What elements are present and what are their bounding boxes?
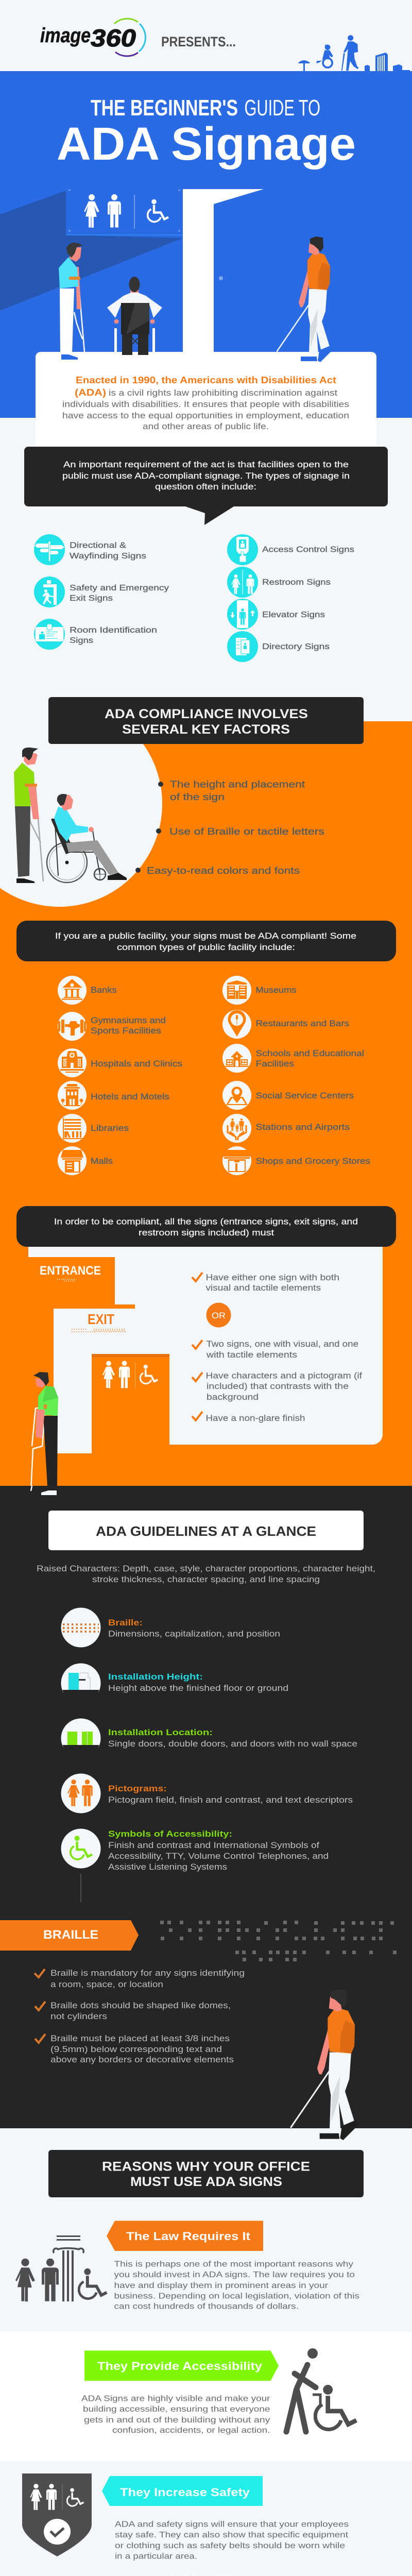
title [57, 95, 356, 170]
text: signage labels left: Signs [70, 636, 93, 645]
text: braille rule items: not cylinders [50, 2012, 107, 2021]
text: braille rule items: Braille dots should be shaped like domes, [50, 2001, 231, 2010]
text: safety paragraph: ADA and safety signs will ensure that your employees [115, 2520, 349, 2529]
item: symbols of accessibility [61, 1829, 329, 1872]
text: requirement items [206, 1273, 362, 1423]
white intro card [36, 352, 376, 455]
heading: reasons: REASONS WHY YOUR OFFICE [102, 2160, 310, 2174]
callout: signage requirement: question often include: [155, 482, 256, 492]
sign: exit [72, 1311, 126, 1332]
text: ADA definition: (ADA) [75, 387, 106, 398]
text: accessibility paragraph: ADA Signs are highly visible and make your [81, 2395, 270, 2403]
reason: the law requires it [15, 2221, 359, 2311]
heading: key factors [48, 697, 364, 744]
text: facility labels: Shops and Grocery Stores [255, 1157, 370, 1166]
list: key factors: The height and placement [170, 779, 305, 789]
item: installation height [61, 1663, 288, 1704]
list: signage types right [227, 534, 354, 662]
illustration: standing man on crutches [14, 748, 43, 883]
item: installation height: Height above the finished floor or ground [108, 1684, 288, 1693]
text: law paragraph: This is perhaps one of the most important reasons why [114, 2260, 353, 2269]
text: facility labels: Schools and Educational [255, 1049, 364, 1058]
callout: signage requirement [24, 447, 388, 525]
item: symbols of accessibility: Assistive Listening Systems [108, 1862, 227, 1872]
illustration: person walking with cane [277, 236, 334, 362]
item: symbols of accessibility: Symbols of Accessibility: [108, 1829, 232, 1839]
text: safety paragraph: or clothing such as safety belts should be worn while [115, 2541, 345, 2550]
icon: library [58, 1114, 87, 1143]
text: requirement items: included) that contrasts with the [207, 1382, 349, 1391]
item: installation location: Installation Location: [108, 1727, 213, 1737]
item: installation location: Single doors, double doors, and doors with no wall space [108, 1739, 357, 1749]
heading: key factors: SEVERAL KEY FACTORS [122, 722, 290, 737]
text: braille rule items [50, 1969, 245, 2064]
text: facility labels: Banks [91, 986, 116, 995]
text: raised characters: stroke thickness, character spacing, and line spacing [92, 1575, 320, 1584]
text: facility labels: Hospitals and Clinics [91, 1059, 182, 1069]
panel: accessibility white band [0, 2331, 412, 2461]
icon: law pictograms [15, 2235, 107, 2301]
logo: image360: image [40, 24, 91, 47]
item: symbols of accessibility: Accessibility, TTY, Volume Control Telephones, and [108, 1852, 329, 1861]
illustration: person in wheelchair [107, 277, 162, 355]
callout: signage requirement: An important requirement of the act is that facilities open to the [63, 460, 349, 469]
callout: public facility: If you are a public facility, your signs must be ADA compliant! Some [55, 931, 356, 941]
callout: signage requirement: public must use ADA-compliant signage. The types of signage in [62, 471, 350, 481]
text: facility labels: Hotels and Motels [91, 1092, 169, 1101]
text: facility labels: Stations and Airports [255, 1123, 350, 1132]
text: signage labels right: Access Control Signs [262, 545, 354, 554]
illustration: seated man in wheelchair [47, 794, 127, 883]
icon: directory [227, 631, 258, 662]
panel: sign requirements background [0, 1247, 383, 1486]
text: facility labels: Museums [255, 986, 297, 995]
text: raised characters: Raised Characters: Depth, case, style, character proportions, character height, [37, 1564, 375, 1573]
item: braille [61, 1607, 280, 1648]
text: accessibility paragraph [81, 2395, 270, 2435]
text: accessibility paragraph: gets in and out of the building without any [84, 2416, 270, 2425]
item: braille: Dimensions, capitalization, and position [108, 1629, 280, 1638]
illustration: walking man with cane [290, 1989, 360, 2140]
logo: image360 [40, 19, 145, 56]
text: facility labels: Libraries [91, 1124, 129, 1133]
text: signage labels right: Elevator Signs [262, 611, 325, 619]
title: ADA Signage [57, 118, 356, 170]
callout: compliance requirements: restroom signs included) must [139, 1228, 274, 1238]
tag: the law requires it [107, 2221, 263, 2251]
text: signage labels left: Directional & [70, 541, 126, 550]
banner: braille: BRAILLE [43, 1928, 98, 1942]
list: public facility icons [58, 976, 370, 1175]
text: signage labels left: Safety and Emergency [70, 584, 169, 592]
panel: hero blue band [0, 71, 412, 418]
crutch tip and shoe over dark band [31, 1486, 57, 1495]
light beam shadow [0, 191, 183, 311]
text: ADA definition: have access to the equal opportunities in employment, education [62, 411, 349, 420]
panel: orange compliance section [0, 721, 412, 1486]
text: ADA definition: is a civil rights law prohibiting discrimination against [109, 388, 337, 398]
text: signage labels left: Exit Signs [70, 594, 113, 603]
item: pictograms [61, 1773, 353, 1814]
text: ADA definition: Enacted in 1990, the Americans with Disabilities Act [76, 375, 336, 385]
title: THE BEGINNER'S [91, 95, 238, 121]
text: signage labels right [262, 545, 354, 651]
sign: entrance: ENTRANCE [40, 1264, 101, 1278]
text: braille rule items: Braille is mandatory for any signs identifying [50, 1969, 245, 1978]
list: key factors: Easy-to-read colors and fonts [147, 865, 300, 876]
icon: directional signs [34, 534, 65, 565]
text: law paragraph: business. Depending on local legislation, violation of this [114, 2292, 359, 2301]
text: law paragraph: can cost hundreds of thousands of dollars. [114, 2302, 299, 2311]
icon: check marks [35, 1969, 45, 2043]
icon: school [222, 1044, 251, 1073]
logo: image360: 360 [91, 24, 136, 52]
text: requirement items: Have either one sign with both [206, 1273, 339, 1282]
icon: restroom [227, 567, 258, 598]
icon: room identification [34, 619, 65, 650]
item: pictograms: Pictogram field, finish and contrast, and text descriptors [108, 1795, 353, 1805]
heading: key factors: ADA COMPLIANCE INVOLVES [105, 707, 308, 721]
illustration: open door [183, 189, 264, 352]
text: accessibility paragraph: building accessible, ensuring that everyone [83, 2405, 270, 2414]
icon: emergency exit [34, 577, 65, 607]
icon: or badge [206, 1302, 231, 1327]
sign: restroom icons [102, 1361, 158, 1388]
text: presents: PRESENTS... [161, 34, 236, 49]
tag: they provide accessibility: They Provide Accessibility [97, 2360, 263, 2372]
illustration: man with crutch [59, 243, 84, 360]
icon: safety shield [22, 2473, 92, 2556]
heading: reasons: MUST USE ADA SIGNS [130, 2175, 282, 2189]
item: symbols of accessibility: Finish and contrast and International Symbols of [108, 1841, 319, 1850]
braille dots [160, 1921, 397, 1961]
icon: museum [222, 976, 251, 1005]
text: signage labels left [70, 541, 169, 645]
callout: public facility: common types of public facility include: [117, 942, 295, 952]
banner: braille [0, 1920, 139, 1951]
list: key factors: Use of Braille or tactile letters [169, 826, 324, 837]
text: signage labels right: Restroom Signs [262, 578, 331, 587]
text: requirement items: Two signs, one with visual, and one [206, 1340, 358, 1349]
icon: gym [58, 1012, 87, 1041]
panel: dark guidelines section [0, 1486, 412, 2128]
text: braille rule items: above any borders or decorative elements [50, 2055, 234, 2064]
icon: access control [227, 534, 258, 565]
text: law paragraph [114, 2260, 359, 2311]
text: safety paragraph [115, 2520, 349, 2561]
tag: they increase safety: They Increase Safety [120, 2486, 250, 2499]
list: key factors: of the sign [170, 791, 225, 802]
text: braille rule items: a room, space, or location [50, 1980, 163, 1989]
icon: map pin [222, 1081, 251, 1110]
text: ADA definition: individuals with disabilities. It ensures that people with disabilities [62, 400, 349, 409]
sign: exit: EXIT [88, 1311, 114, 1327]
item: braille: Braille: [108, 1618, 143, 1628]
sign: restroom and accessibility [66, 189, 183, 235]
connector line [80, 1874, 81, 1902]
icon: shop [222, 1146, 251, 1175]
text: facility labels: Sports Facilities [91, 1026, 161, 1036]
icon: person pushing wheelchair [286, 2348, 356, 2432]
illustration: man with crutch looking at signs [31, 1372, 58, 1491]
text: law paragraph: have and display them in prominent areas in your [114, 2281, 329, 2290]
text: facility labels: Restaurants and Bars [255, 1019, 349, 1028]
text: safety paragraph: in a particular area. [115, 2552, 197, 2561]
text: requirement items: Have characters and a pictogram (if [206, 1371, 362, 1381]
text: facility labels: Gymnasiums and [91, 1016, 166, 1025]
icon: family in hands [222, 1114, 251, 1143]
callout: public facility [16, 921, 396, 961]
text: braille rule items: (9.5mm) below corresponding text and [50, 2045, 222, 2054]
item: pictograms: Pictograms: [108, 1784, 167, 1793]
text: braille rule items: Braille must be placed at least 3/8 inches [50, 2034, 230, 2043]
heading: reasons [48, 2150, 364, 2197]
list: signage types left [34, 534, 169, 650]
tag: they increase safety [102, 2476, 263, 2506]
reason: they provide accessibility [81, 2348, 356, 2435]
tag: the law requires it: The Law Requires It [126, 2230, 251, 2243]
text: raised characters [37, 1564, 375, 1584]
text: requirement items: with tactile elements [206, 1350, 297, 1360]
text: facility labels [91, 986, 370, 1166]
icon: elevator [227, 599, 258, 630]
text: safety paragraph: stay safe. They can also show that specific equipment [115, 2531, 349, 2539]
text: signage labels left: Wayfinding Signs [70, 552, 146, 561]
text: requirement items: Have a non-glare finish [206, 1414, 305, 1423]
text: requirement items: visual and tactile elements [206, 1283, 321, 1293]
list: sign requirements [192, 1273, 362, 1423]
text: facility labels: Facilities [255, 1059, 294, 1069]
text: ADA definition: and other areas of public life. [143, 422, 269, 431]
light circle behind figures [0, 701, 162, 907]
icon: mall [58, 1146, 87, 1175]
item: installation height: Installation Height: [108, 1672, 203, 1682]
list: key factors [135, 779, 324, 876]
title: GUIDE TO [244, 95, 320, 121]
tag: they provide accessibility [84, 2350, 279, 2381]
heading: guidelines: ADA GUIDELINES AT A GLANCE [96, 1523, 316, 1539]
reason: they increase safety [22, 2473, 349, 2561]
icon: hospital [58, 1048, 87, 1077]
text: facility labels: Malls [91, 1157, 113, 1166]
text: facility labels: Social Service Centers [255, 1091, 354, 1100]
text: ADA definition [62, 375, 349, 431]
heading: guidelines [48, 1511, 364, 1550]
icon: check marks [192, 1273, 202, 1420]
icon: or badge: OR [212, 1311, 226, 1320]
item: installation location [61, 1719, 357, 1759]
icon: bank [58, 976, 87, 1005]
text: accessibility paragraph: confusion, accidents, or legal action. [112, 2426, 270, 2435]
text: signage labels left: Room Identification [70, 626, 157, 635]
text: law paragraph: you should invest in ADA signs. The law requires you to [114, 2270, 355, 2279]
callout: compliance requirements [16, 1206, 396, 1247]
callout: compliance requirements: In order to be compliant, all the signs (entrance signs, exit signs, and [54, 1217, 358, 1226]
text: requirement items: background [207, 1393, 259, 1402]
icon: hotel [58, 1081, 87, 1110]
illustration: top right skyline [298, 35, 410, 71]
list: braille rules [35, 1969, 245, 2064]
text: signage labels right: Directory Signs [262, 642, 330, 651]
icon: restaurant pin [222, 1010, 251, 1039]
